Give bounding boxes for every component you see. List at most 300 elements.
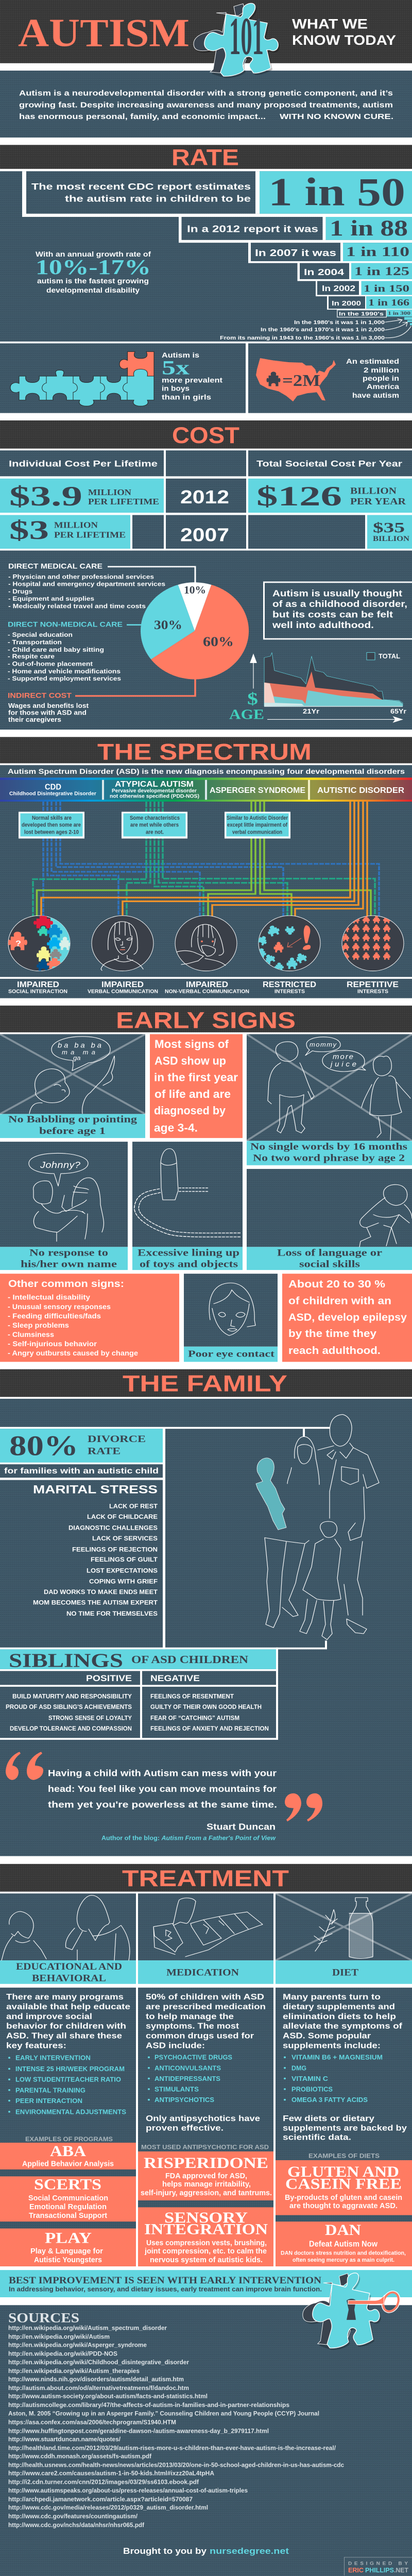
banner: early intervention: [0, 2270, 412, 2297]
program: ABA: Applied Behavior Analysis: [22, 2160, 114, 2168]
heading: [16, 1961, 122, 1984]
diet: DAN: [276, 2222, 412, 2266]
caption: No response to: [29, 1247, 108, 1258]
illustration: face: [209, 1283, 255, 1335]
spectrum band: AUTISTIC DISORDER: [317, 786, 404, 795]
illustration: bottle and wheat: [314, 1897, 373, 1958]
source list: http://www.ninds.nih.gov/disorders/autism/detail_autism.htm: [8, 2376, 184, 2383]
program: SCERTS: [0, 2176, 136, 2222]
drug list: ANTICONVULSANTS: [154, 2064, 221, 2072]
diet: gluten and casein free: CASEIN FREE: [285, 2175, 402, 2192]
pie chart: 60%: [203, 634, 234, 650]
icon: non-verbal communication face: [175, 916, 237, 971]
column: educational and behavioral: ASD. They all share these: [6, 2031, 122, 2040]
source list: http://en.wikipedia.org/wiki/PDD-NOS: [8, 2350, 117, 2358]
marital stress list: MOM BECOMES THE AUTISM EXPERT: [33, 1599, 158, 1606]
drug: risperidone: self-injury, aggression, and tantrums.: [141, 2189, 272, 2197]
caption: [21, 1247, 117, 1269]
marital stress list: LACK OF CHILDCARE: [87, 1513, 158, 1520]
table: values: PER YEAR: [350, 497, 406, 507]
siblings lists: PROUD OF ASD SIBLING'S ACHIEVEMENTS: [6, 1704, 132, 1710]
diet: DAN: often seeing mercury as a main culprit.: [293, 2257, 394, 2263]
source list: http://archpedi.jamanetwork.com/article.aspx?articleid=570087: [8, 2496, 193, 2503]
spectrum band: not otherwise specified (PDD-NOS): [110, 794, 199, 800]
feature list: LOW STUDENT/TEACHER RATIO: [15, 2076, 121, 2083]
drug: risperidone: FDA approved for ASD,: [165, 2172, 247, 2180]
direct medical care: - Medically related travel and time costs: [8, 603, 146, 609]
boys vs girls text: more prevalent: [162, 377, 222, 384]
note: atypical autism: are met while others: [130, 822, 179, 828]
area chart: cost by age: AGE: [229, 707, 264, 722]
note: asperger: Similar to Autistic Disorder: [227, 815, 288, 821]
note: asperger: verbal communication: [232, 829, 282, 835]
growth rate callout: 10%-17%: [36, 256, 151, 279]
program: PLAY: [0, 2229, 136, 2266]
source list: http://www.cdc.gov/features/countingautism/: [8, 2513, 138, 2520]
panel: spectrum labels: REPETITIVE: [347, 980, 399, 989]
indirect cost: [8, 692, 89, 723]
subtitle: WHAT WE: [292, 16, 368, 32]
column: educational and behavioral: behavior for children with: [6, 2022, 126, 2030]
diet: DAN: Defeat Autism Now: [309, 2240, 377, 2248]
panel: spectrum labels: INTERESTS: [357, 989, 388, 994]
intro panel: has enormous personal, family, and economic impact...: [19, 113, 266, 121]
note: atypical autism: [122, 812, 187, 839]
caption: social skills: [299, 1259, 360, 1269]
diet: gluten and casein free: By-products of gluten and casein: [285, 2194, 402, 2202]
source list: http://www.stuartduncan.name/quotes/: [8, 2436, 121, 2443]
column: educational and behavioral: available that help educate: [6, 2002, 130, 2011]
callout: most signs: [150, 1034, 243, 1138]
column: educational and behavioral: There are many programs: [6, 1992, 124, 2002]
estimate text: America: [367, 383, 399, 391]
spectrum band: ATYPICAL AUTISM: [115, 780, 194, 789]
pie chart: 30%: [154, 617, 182, 632]
rate: historic values: 1 in 125: [354, 265, 409, 278]
supplement list: VITAMIN B6 + MAGNESIUM: [291, 2054, 383, 2061]
credit: designer: PHILLIPS: [365, 2567, 394, 2574]
caption: [277, 1247, 382, 1269]
panel: medication illustration: [138, 1893, 273, 1984]
panel: spectrum labels: IMPAIRED: [186, 980, 228, 989]
icon: repetitive interests: [342, 916, 404, 971]
column: medication: are prescribed medication: [146, 2002, 266, 2011]
panel: sources: [0, 2305, 412, 2576]
panel: no response to name: Johnny?: [40, 1160, 80, 1171]
icon: verbal communication face: [92, 916, 153, 971]
table: values: [9, 481, 409, 545]
arrows: early rates: [385, 319, 411, 338]
panel: lining up toys: [132, 1142, 243, 1270]
caption: [138, 1247, 239, 1269]
source list: http://autism.about.com/od/alternativetreatmens/f/dandoc.htm: [8, 2385, 189, 2392]
panel: other common signs: - Intellectual disability: [8, 1294, 90, 1301]
growth rate callout: With an annual growth rate of: [36, 251, 151, 259]
feature list: [8, 2054, 126, 2115]
quote: Having a child with Autism can mess with your: [48, 1769, 277, 1778]
table: values: $3.9: [9, 481, 82, 512]
icon: header puzzle piece with 101: 101: [229, 6, 264, 65]
source list: http://www.cdc.gov/media/releases/2012/p0329_autism_disorder.html: [8, 2504, 208, 2511]
note: CDD: [19, 812, 84, 839]
callout: most signs: in the first year: [154, 1072, 238, 1084]
rate: historic values: 1 in 50: [268, 170, 405, 214]
table: values: PER LIFETIME: [88, 497, 159, 506]
column: diet: elimination diets to help: [283, 2012, 396, 2021]
panel: epilepsy: of children with an: [288, 1294, 391, 1307]
siblings lists: [6, 1693, 269, 1732]
callout: childhood disorder: well into adulthood.: [272, 620, 374, 631]
siblings lists: BUILD MATURITY AND RESPONSIBILITY: [12, 1693, 132, 1700]
icon: puzzle equals 2M: [267, 371, 320, 389]
callout: childhood disorder: of as a childhood disorder,: [272, 599, 407, 609]
siblings lists: STRONG SENSE OF LOYALTY: [48, 1715, 132, 1721]
icon: restricted interests: [255, 916, 320, 971]
caption: Poor eye contact: [188, 1349, 275, 1359]
direct non-medical care: - Transportation: [8, 639, 62, 646]
siblings panel: POSITIVE: [86, 1673, 132, 1683]
column: diet: dietary supplements and: [283, 2002, 395, 2011]
table: values: MILLION: [88, 487, 131, 497]
panel: boys vs girls: [0, 343, 246, 413]
direct non-medical care: [8, 621, 123, 682]
heading: treatment: [0, 1864, 412, 1892]
caption: before age 1: [39, 1126, 106, 1137]
rate: historic values: 1 in 110: [346, 244, 409, 260]
rate: historic values: 1 in 88: [330, 215, 408, 240]
table: cost: [0, 450, 412, 549]
spectrum intro: Autism Spectrum Disorder (ASD) is the new diagnosis encompassing four developmental disorders: [8, 768, 405, 776]
illustration: family: [256, 1414, 379, 1640]
source list: http://www.cddh.monash.org/assets/fs-autism.pdf: [8, 2453, 152, 2460]
direct non-medical care: - Special education: [8, 632, 73, 638]
credit: designer: [344, 2557, 412, 2575]
siblings lists: DEVELOP TOLERANCE AND COMPASSION: [10, 1725, 132, 1732]
illustration: pill box: [153, 1898, 263, 1957]
drug list: ANTIDEPRESSANTS: [154, 2075, 220, 2082]
marital stress list: LOST EXPECTATIONS: [87, 1567, 158, 1574]
map: United States: [256, 358, 336, 401]
boys vs girls text: in boys: [162, 385, 190, 393]
source list: http://health.usnews.com/health-news/news/articles/2013/03/20/one-in-50-school-aged-children-in-us-has-autism-cdc: [8, 2462, 344, 2468]
banner: early intervention: In addressing behavior, sensory, and dietary issues, early treatment can improve brain function.: [9, 2285, 322, 2293]
caption: of toys and objects: [140, 1259, 238, 1269]
estimate text: 2 million: [364, 367, 399, 375]
heading: the spectrum: [0, 737, 412, 765]
therapy: sensory integration: INTEGRATION: [144, 2221, 268, 2238]
spectrum band: [0, 777, 412, 802]
indirect cost: Wages and benefits lost: [8, 702, 89, 709]
quote: Author of the blog: Autism From a Father's Point of View: [101, 1835, 276, 1841]
therapy: sensory integration: joint compression, etc. to calm the: [144, 2247, 267, 2256]
supplement list: PROBIOTICS: [291, 2086, 333, 2093]
divorce stat: RATE: [88, 1446, 121, 1456]
source list: http://healthland.time.com/2012/03/29/autism-rises-more-u-s-children-than-ever-have-autism-is-the-increase-real/: [8, 2445, 336, 2451]
drug: risperidone: RISPERIDONE: [144, 2155, 268, 2172]
heading: cost: COST: [172, 422, 239, 448]
heading: the spectrum: THE SPECTRUM: [97, 739, 312, 765]
drug list: STIMULANTS: [154, 2086, 199, 2093]
panel: diet illustration: DIET: [332, 1968, 358, 1978]
program: ABA: [0, 2142, 136, 2170]
panel: spectrum labels: SOCIAL INTERACTION: [8, 989, 67, 994]
estimate text: An estimated: [346, 358, 399, 366]
area chart: cost by age: 65Yr: [390, 707, 406, 715]
area chart: cost by age: $: [247, 690, 258, 708]
rate: historic values: 1 in 166: [368, 298, 409, 308]
marital stress list: FEELINGS OF REJECTION: [72, 1546, 158, 1553]
callout: childhood disorder: but its costs can be felt: [272, 609, 393, 620]
illustration: mother calling child: [29, 1153, 104, 1242]
panel: no single words: mommy: [310, 1041, 337, 1048]
panel: cost breakdown: [0, 551, 412, 730]
rate: historic labels: In the 1980's it was 1 in 1,000: [294, 320, 385, 326]
source list: http://i2.cdn.turner.com/cnn/2012/images/03/29/ss6103.ebook.pdf: [8, 2479, 199, 2486]
column: diet: EXAMPLES OF DIETS: [308, 2153, 380, 2159]
illustration: two children: [268, 1037, 410, 1140]
subtitle: KNOW TODAY: [292, 32, 396, 48]
rate: historic labels: In 2000: [332, 300, 361, 307]
panel: epilepsy: [282, 1274, 412, 1362]
callout: most signs: of life and are: [154, 1088, 231, 1101]
panel: no babbling: ba ba ba: [58, 1042, 101, 1049]
growth rate callout: developmental disability: [46, 287, 140, 295]
source list: https://asa.confex.com/asa/2006/techprogram/S1940.HTM: [8, 2419, 176, 2426]
source list: http://en.wikipedia.org/wiki/Asperger_syndrome: [8, 2342, 147, 2349]
source list: http://en.wikipedia.org/wiki/Autism_spectrum_disorder: [8, 2325, 167, 2331]
panel: other common signs: - Feeding difficulties/fads: [8, 1313, 101, 1320]
marital stress list: [33, 1484, 158, 1617]
marital stress list: MARITAL STRESS: [33, 1484, 158, 1496]
column: medication: [138, 1988, 273, 2266]
panel: epilepsy: by the time they: [288, 1327, 377, 1340]
source list: Aston, M. 2005 “Growing up in an Asperger Family.” Counseling Children and Young People (CCYP) Journal: [8, 2410, 319, 2417]
rate: historic labels: In a 2012 report it was: [187, 224, 318, 234]
panel: no single words: [247, 1034, 412, 1165]
caption: No single words by 16 months: [250, 1141, 407, 1152]
callout: childhood disorder: [264, 582, 412, 639]
panel: no response to name: [0, 1142, 128, 1270]
direct medical care: - Drugs: [8, 588, 32, 595]
note: asperger: except little impairment of: [227, 822, 287, 828]
direct non-medical care: - Supported employment services: [8, 675, 121, 682]
rate: historic values: [268, 170, 410, 316]
credit: designer: .NET: [394, 2567, 408, 2574]
column: educational and behavioral: [0, 1988, 136, 2266]
rate: current estimate: The most recent CDC report estimates: [31, 182, 251, 192]
siblings panel: OF ASD CHILDREN: [131, 1654, 248, 1666]
icon: puzzle row: [10, 352, 154, 406]
rate: historic labels: In 2004: [304, 267, 345, 278]
source list: http://www.care2.com/causes/autism-1-in-50-kids.html#ixzz20aL4tpHA: [8, 2470, 214, 2477]
panel: no babbling: [0, 1034, 145, 1138]
panel: other common signs: - Unusual sensory responses: [8, 1303, 111, 1311]
panel: spectrum labels: RESTRICTED: [263, 980, 316, 989]
panel: spectrum labels: VERBAL COMMUNICATION: [88, 989, 158, 994]
heading: cost: [0, 420, 412, 449]
panel: epilepsy: reach adulthood.: [288, 1344, 381, 1357]
boys vs girls text: than in girls: [162, 394, 211, 401]
heading: early signs: EARLY SIGNS: [116, 1008, 296, 1033]
credit: brought to you by: [123, 2546, 289, 2556]
heading: rate: [0, 145, 412, 171]
source list: http://en.wikipedia.org/wiki/Autism: [8, 2333, 110, 2340]
icon: header puzzle piece with 101: [194, 3, 280, 78]
note: atypical autism: are not.: [146, 829, 164, 835]
quote: head: You feel like you can move mountains for: [48, 1784, 277, 1794]
pie chart: [75, 567, 249, 696]
siblings lists: GUILTY OF THEIR OWN GOOD HEALTH: [150, 1704, 262, 1710]
callout: childhood disorder: Autism is usually thought: [272, 588, 403, 599]
caption: No Babbling or pointing: [8, 1114, 137, 1125]
source list: [8, 2325, 344, 2529]
panel: spectrum diagram: [0, 765, 412, 977]
drug list: PSYCHOACTIVE DRUGS: [154, 2054, 232, 2061]
panel: educational and behavioral illustration: [0, 1893, 136, 1984]
marital stress list: LACK OF SERVICES: [92, 1535, 158, 1542]
heading: early signs: [0, 1006, 412, 1033]
caption: his/her own name: [21, 1259, 117, 1269]
therapy: sensory integration: SENSORY: [164, 2209, 248, 2226]
marital stress list: LACK OF REST: [109, 1503, 158, 1510]
feature list: INTENSE 25 HR/WEEK PROGRAM: [15, 2065, 125, 2073]
table: years: [180, 487, 229, 546]
heading: treatment: TREATMENT: [122, 1866, 289, 1891]
credit: designer: DESIGNED BY: [348, 2561, 408, 2566]
table headers: Total Societal Cost Per Year: [256, 459, 402, 468]
program: PLAY: Autistic Youngsters: [34, 2256, 102, 2264]
supplement list: [284, 2054, 383, 2104]
icon: puzzle piece with key: [303, 2273, 403, 2350]
connection lines: [33, 802, 379, 916]
column: diet: ASD. Some popular: [283, 2031, 371, 2040]
intro panel: [0, 71, 412, 138]
caption: No two word phrase by age 2: [253, 1153, 405, 1163]
boys vs girls text: [162, 352, 222, 401]
note: atypical autism: Some characteristics: [130, 815, 180, 821]
note: CDD: lost between ages 2-10: [24, 829, 79, 835]
source list: http://www.autismspeaks.org/about-us/press-releases/annual-cost-of-autism-triples: [8, 2487, 248, 2494]
therapy: sensory integration: nervous system of autistic kids.: [150, 2256, 263, 2264]
indirect cost: INDIRECT COST: [8, 692, 72, 700]
direct medical care: - Hospital and emergency department services: [8, 581, 165, 587]
caption: Excessive lining up: [138, 1247, 239, 1258]
area chart: cost by age: 21Yr: [303, 707, 319, 715]
heading: BEHAVIORAL: [32, 1973, 106, 1984]
panel: rate: [0, 170, 412, 342]
column: diet: [276, 1988, 412, 2266]
spectrum band: ASPERGER SYNDROME: [210, 786, 305, 795]
program: SCERTS: Social Communication: [28, 2194, 108, 2202]
panel: spectrum labels: NON-VERBAL COMMUNICATION: [165, 989, 249, 994]
rate: historic labels: From its naming in 1943 to the 1960's it was 1 in 3,000: [220, 336, 385, 341]
direct non-medical care: DIRECT NON-MEDICAL CARE: [8, 621, 123, 629]
quote: them yet you're powerless at the same time.: [48, 1800, 277, 1810]
divorce stat: DIVORCE: [88, 1434, 146, 1445]
column: educational and behavioral: key features:: [6, 2041, 66, 2050]
feature list: ENVIRONMENTAL ADJUSTMENTS: [15, 2108, 126, 2115]
table: values: PER LIFETIME: [54, 530, 126, 539]
divorce stat: 80%: [9, 1430, 78, 1462]
rate: historic labels: [187, 224, 385, 341]
note: CDD: Normal skills are: [32, 815, 72, 821]
panel: epilepsy: About 20 to 30 %: [288, 1278, 385, 1290]
panel: no single words: more: [333, 1053, 353, 1061]
callout: most signs: age 3-4.: [154, 1122, 198, 1134]
rate: historic labels: In 2002: [322, 284, 355, 293]
panel: poor eye contact: [184, 1274, 278, 1362]
table: values: $35: [373, 520, 405, 535]
growth rate callout: autism is the fastest growing: [37, 278, 149, 285]
area chart: cost by age: [229, 653, 406, 722]
boys vs girls text: Autism is: [162, 352, 199, 360]
area chart: cost by age: TOTAL: [379, 653, 400, 660]
source list: http://en.wikipedia.org/wiki/Childhood_disintegrative_disorder: [8, 2359, 189, 2366]
marital stress list: DIAGNOSTIC CHALLENGES: [68, 1524, 158, 1531]
table: years: 2007: [180, 526, 229, 546]
source list: http://www.autism-society.org/about-autism/facts-and-statistics.html: [8, 2393, 208, 2400]
indirect cost: for those with ASD and: [8, 709, 87, 716]
direct medical care: DIRECT MEDICAL CARE: [8, 563, 102, 570]
quote: [6, 1752, 322, 1841]
marital stress list: NO TIME FOR THEMSELVES: [66, 1611, 158, 1617]
illustration: child and toy line: [136, 1148, 241, 1235]
growth rate callout: [36, 251, 151, 295]
note: CDD: developed then some are: [22, 822, 81, 828]
panel: no babbling: ma ma: [62, 1049, 95, 1056]
spectrum band: Pervasive developmental disorder: [112, 788, 197, 794]
source list: http://autismcollege.com/library/47/the-affects-of-autism-in-families-and-in-partner-relationships: [8, 2402, 289, 2409]
source list: http://www.cdc.gov/nchs/data/nhsr/nhsr065.pdf: [8, 2522, 145, 2529]
siblings panel: SIBLINGS: [9, 1649, 123, 1671]
quote marks: [6, 1752, 322, 1821]
table: values: BILLION: [350, 486, 397, 496]
marital stress list: COPING WITH GRIEF: [89, 1578, 158, 1585]
illustration: sitting child: [359, 1184, 412, 1247]
caption: [8, 1114, 137, 1137]
column: diet: Few diets or dietary: [283, 2114, 375, 2123]
drug list: ANTIPSYCHOTICS: [154, 2096, 214, 2104]
heading: EDUCATIONAL AND: [16, 1961, 122, 1972]
column: diet: supplements include:: [283, 2041, 381, 2050]
quote: Stuart Duncan: [207, 1822, 276, 1832]
siblings panel: NEGATIVE: [150, 1673, 200, 1683]
illustration: child and therapist: [2, 1895, 130, 1960]
rate: current estimate: the autism rate in children to be: [65, 194, 251, 204]
marital stress list: FEELINGS OF GUILT: [91, 1556, 158, 1563]
column: medication: proven effective.: [146, 2123, 224, 2132]
title: AUTISM: AUTISM: [18, 11, 190, 55]
icon: social interaction mosaic: [8, 915, 71, 971]
drug: risperidone: [138, 2151, 273, 2200]
table headers: Individual Cost Per Lifetime: [9, 459, 158, 468]
intro panel: Autism is a neurodevelopmental disorder with a strong genetic component, and it’s: [19, 89, 393, 97]
supplement list: DMG: [291, 2064, 306, 2072]
heading: rate: RATE: [171, 145, 239, 171]
program: SCERTS: Transactional Support: [29, 2212, 107, 2220]
column: medication: common drugs used for: [146, 2031, 254, 2040]
column: diet: Many parents turn to: [283, 1992, 381, 2002]
panel: other common signs: Other common signs:: [8, 1278, 124, 1290]
therapy: sensory integration: [138, 2207, 273, 2266]
drug: risperidone: helps manage irritability,: [162, 2180, 251, 2189]
header band: [0, 0, 412, 63]
column: diet: scientific data.: [283, 2132, 351, 2142]
estimate text: [346, 358, 399, 400]
supplement list: VITAMIN C: [291, 2075, 328, 2082]
marital stress list: DAD WORKS TO MAKE ENDS MEET: [44, 1588, 158, 1596]
heading: the family: THE FAMILY: [123, 1371, 287, 1397]
